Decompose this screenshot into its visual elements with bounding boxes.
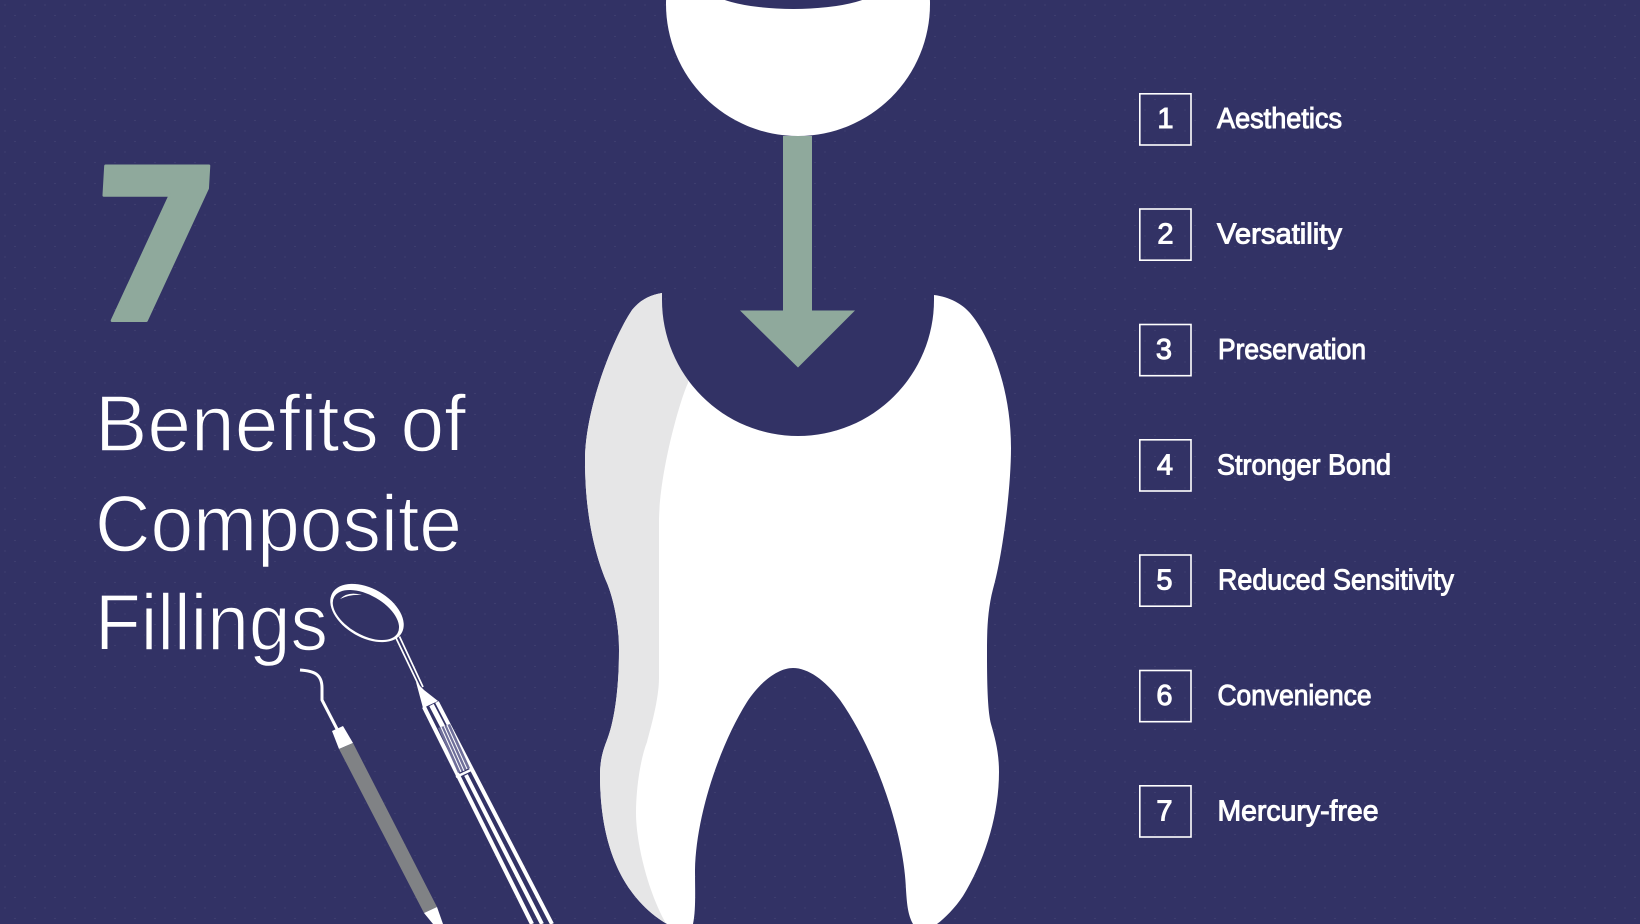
item 3	[1140, 324, 1366, 376]
item 2: 2	[1157, 218, 1174, 250]
tooth crown piece	[666, 0, 930, 136]
title: Benefits of Composite Fillings: Composite	[95, 479, 462, 568]
title: Benefits of Composite Fillings: Fillings	[95, 578, 328, 667]
item 6: 6	[1156, 680, 1173, 712]
item 3: Preservation	[1218, 334, 1366, 366]
item 7: 7	[1156, 795, 1173, 827]
title: Benefits of Composite Fillings: Benefits of	[95, 379, 467, 468]
item 7	[1140, 786, 1378, 837]
big numeral 7: 7	[81, 125, 226, 371]
item 5: 5	[1156, 565, 1173, 597]
item 3: 3	[1156, 334, 1172, 366]
item 2	[1140, 209, 1342, 260]
arrow pointing down	[740, 136, 855, 368]
benefits list	[1140, 94, 1454, 837]
title: Benefits of Composite Fillings	[95, 379, 467, 667]
item 5	[1140, 555, 1454, 606]
icon: dental probe	[300, 670, 443, 924]
item 1: Aesthetics	[1217, 103, 1342, 135]
item 6: Convenience	[1218, 680, 1372, 712]
item 2: Versatility	[1217, 218, 1342, 250]
item 1: 1	[1157, 103, 1174, 135]
item 5: Reduced Sensitivity	[1218, 565, 1454, 597]
icon: dental mirror	[320, 572, 552, 924]
item 4: Stronger Bond	[1217, 449, 1391, 481]
mirror handle	[416, 682, 552, 924]
tooth with cavity	[585, 293, 1011, 924]
mirror head	[320, 572, 414, 654]
item 4	[1140, 440, 1391, 491]
mirror shaft	[396, 636, 423, 688]
item 6	[1140, 670, 1372, 722]
item 4: 4	[1157, 449, 1173, 481]
item 7: Mercury-free	[1218, 795, 1378, 827]
item 1	[1140, 94, 1342, 145]
